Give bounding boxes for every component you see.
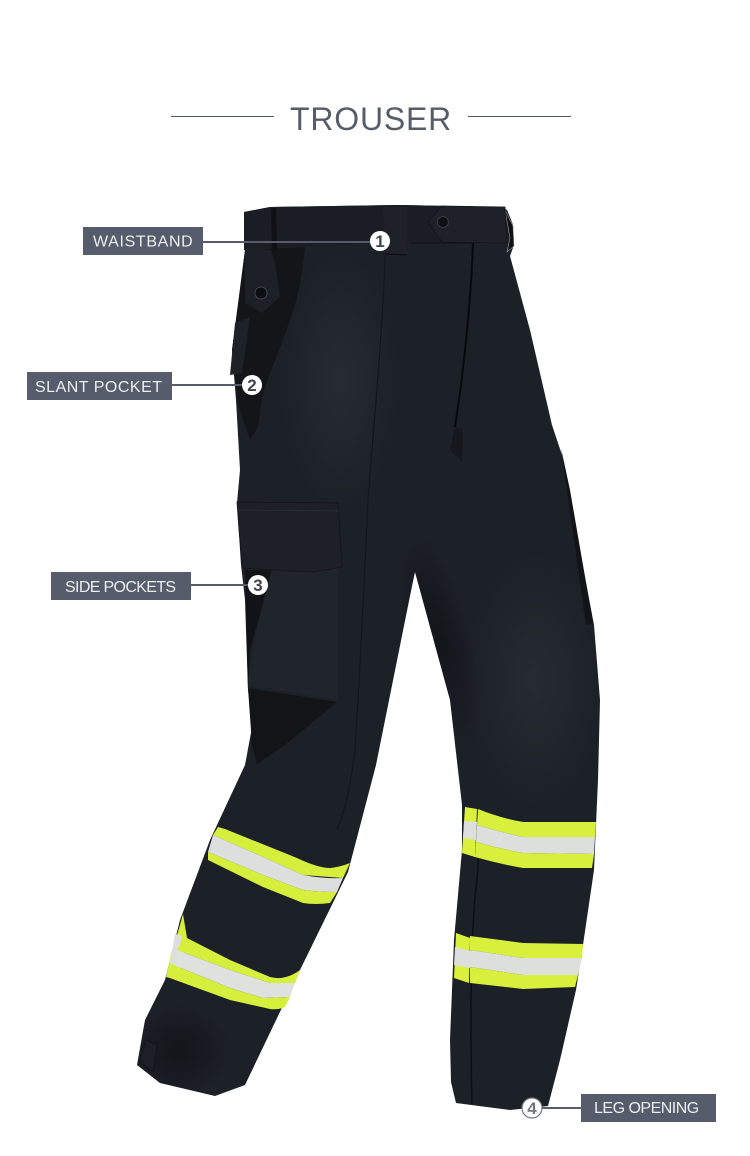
dark shadow beside side pocket <box>245 570 272 690</box>
label box <box>51 572 191 600</box>
flap button <box>255 287 267 299</box>
number marker <box>522 1098 542 1118</box>
number marker: 1 <box>375 232 385 251</box>
pocket button flap <box>245 247 280 313</box>
label text: WAISTBAND <box>93 234 193 250</box>
label text: SIDE POCKETS <box>65 579 175 596</box>
number marker: 4 <box>527 1099 537 1118</box>
loop stitch <box>385 254 407 255</box>
number marker <box>242 375 262 395</box>
trousers illustration <box>130 205 605 1110</box>
trouser body <box>137 205 600 1110</box>
band yellow bottom <box>208 852 337 904</box>
band yellow top <box>470 936 583 958</box>
band yellow bottom <box>470 967 578 989</box>
band yellow top <box>213 827 350 878</box>
label text: LEG OPENING <box>594 1100 699 1117</box>
number marker: 3 <box>253 576 263 595</box>
belt loop left <box>271 208 277 252</box>
inner piece yellow <box>462 807 477 857</box>
shadow under side pocket <box>248 688 337 764</box>
belt loop right <box>505 210 514 252</box>
label text: SLANT POCKET <box>35 379 163 396</box>
title rule left <box>171 116 274 117</box>
small rear pocket edge <box>230 317 250 375</box>
label box <box>27 372 172 400</box>
leader line <box>191 584 249 586</box>
band yellow top <box>177 937 300 983</box>
inner piece silver <box>463 821 477 840</box>
number marker: 2 <box>247 376 257 395</box>
band yellow bottom <box>475 842 594 868</box>
left cuff tab <box>139 1040 157 1072</box>
side pocket flap <box>237 502 342 572</box>
flap stitch <box>238 510 339 511</box>
wrap-around silver <box>170 934 182 966</box>
waistband <box>244 205 513 250</box>
wrap-around sliver <box>166 914 187 980</box>
band silver <box>476 825 595 854</box>
callout 4: leg opening <box>522 1094 716 1122</box>
band silver <box>470 950 582 975</box>
number marker <box>370 231 390 251</box>
belt loop centre <box>383 207 407 255</box>
side pocket body <box>248 568 338 700</box>
fabric shading <box>130 250 605 1095</box>
leader line <box>542 1107 581 1109</box>
waist tab with button <box>428 206 507 243</box>
reflective band left lower <box>166 914 300 1009</box>
band silver <box>176 950 295 998</box>
waistband lower stitch <box>410 242 473 244</box>
callout 1: waistband <box>83 227 390 255</box>
label box <box>83 227 203 255</box>
band silver <box>208 835 343 892</box>
title rule right <box>468 116 571 117</box>
slant pocket opening <box>232 247 305 440</box>
callout 3: side pockets <box>51 572 268 600</box>
reflective band right lower <box>454 933 583 989</box>
leader line <box>172 384 244 386</box>
inner piece yellow <box>454 933 470 983</box>
band yellow top <box>477 809 596 837</box>
inner piece silver <box>454 947 470 968</box>
title text: TROUSER <box>290 101 452 137</box>
reflective band left upper <box>208 827 350 904</box>
fly base <box>450 427 463 462</box>
callout 2: slant pocket <box>27 372 262 400</box>
leader line <box>203 241 371 243</box>
fly seam <box>455 243 473 427</box>
tab button <box>438 216 448 228</box>
number marker <box>248 575 268 595</box>
front crease <box>337 255 385 830</box>
reflective band right upper <box>462 807 596 868</box>
band yellow bottom <box>167 966 290 1009</box>
rear side pocket <box>561 448 593 625</box>
outer leg seam <box>471 810 478 1104</box>
label box <box>581 1094 716 1122</box>
